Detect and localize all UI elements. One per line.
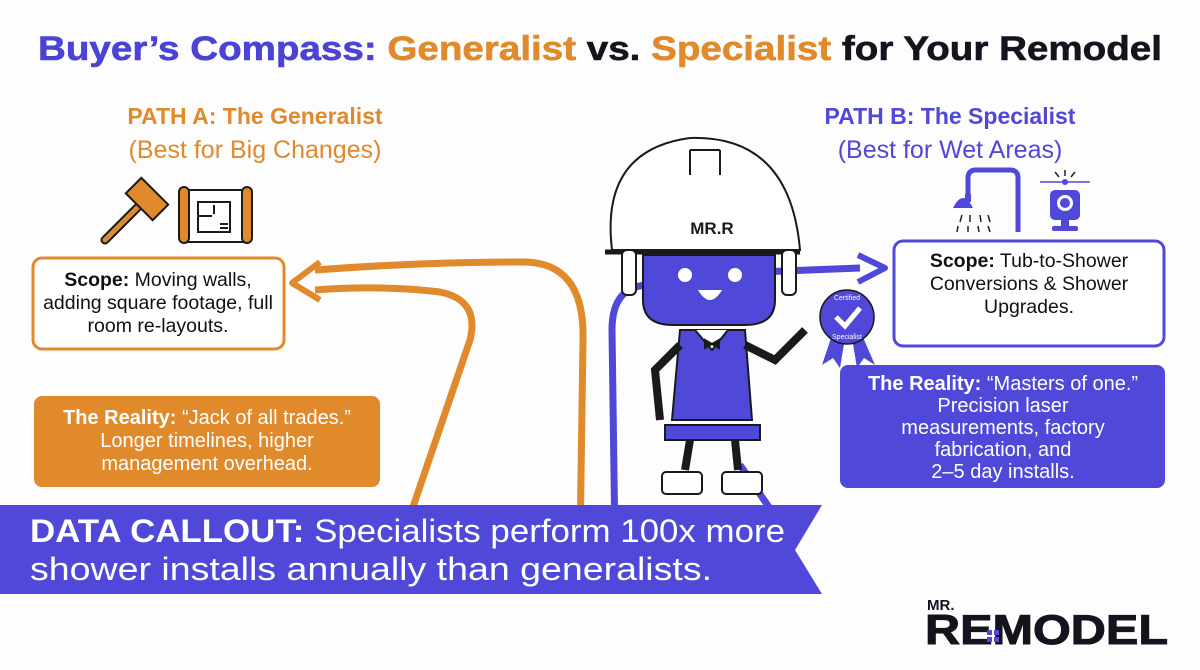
callout: data banner: DATA CALLOUT: Specialists perform 100x more <box>30 513 785 549</box>
heading: path A: PATH A: The Generalist <box>127 103 383 129</box>
icon: laser level <box>1040 170 1090 231</box>
panel: generalist scope: adding square footage, full <box>43 292 273 314</box>
robot mascot <box>605 138 805 494</box>
panel: specialist scope: Conversions & Shower <box>930 273 1129 295</box>
robot mascot: MR.R <box>690 219 734 238</box>
panel: generalist reality: Longer timelines, higher <box>100 430 314 452</box>
callout: data banner <box>0 505 822 594</box>
panel: generalist scope: room re-layouts. <box>88 315 228 337</box>
panel: specialist reality: measurements, factory <box>901 417 1105 439</box>
panel: specialist reality: fabrication, and <box>935 439 1071 461</box>
logo: MR. <box>927 597 954 614</box>
arrow: orange generalist path <box>292 262 583 545</box>
icon: certified badge: Certified <box>834 295 860 302</box>
heading: path B <box>825 103 1076 164</box>
icon: hammer <box>105 178 168 240</box>
heading: path A <box>127 103 383 164</box>
heading: path B: (Best for Wet Areas) <box>838 136 1062 164</box>
heading: path B: PATH B: The Specialist <box>825 103 1076 129</box>
arrow: blue specialist path <box>612 255 885 545</box>
panel: specialist scope: Scope: Tub-to-Shower <box>930 250 1129 272</box>
panel: generalist scope <box>33 258 284 349</box>
logo: REMODEL <box>925 606 1168 653</box>
heading: path A: (Best for Big Changes) <box>129 136 381 164</box>
panel: specialist scope: Upgrades. <box>984 296 1074 318</box>
icon: certified badge: Specialist <box>832 334 862 341</box>
icon: certified badge <box>820 290 875 368</box>
panel: specialist reality: 2–5 day installs. <box>931 461 1075 483</box>
icon: shower <box>953 170 1018 232</box>
panel: specialist reality: Precision laser <box>937 395 1069 417</box>
title: Buyer’s Compass: Generalist vs. Specialist for Your Remodel <box>38 30 1162 68</box>
icon: blueprint <box>179 187 252 243</box>
panel: generalist reality: management overhead. <box>101 453 313 475</box>
callout: data banner: shower installs annually than generalists. <box>30 551 712 587</box>
panel: specialist reality <box>840 365 1165 488</box>
panel: generalist scope: Scope: Moving walls, <box>64 269 252 291</box>
panel: specialist reality: The Reality: “Masters of one.” <box>868 373 1138 395</box>
panel: specialist scope <box>894 241 1164 346</box>
panel: generalist reality: The Reality: “Jack of all trades.” <box>63 407 351 429</box>
panel: generalist reality <box>34 396 380 487</box>
